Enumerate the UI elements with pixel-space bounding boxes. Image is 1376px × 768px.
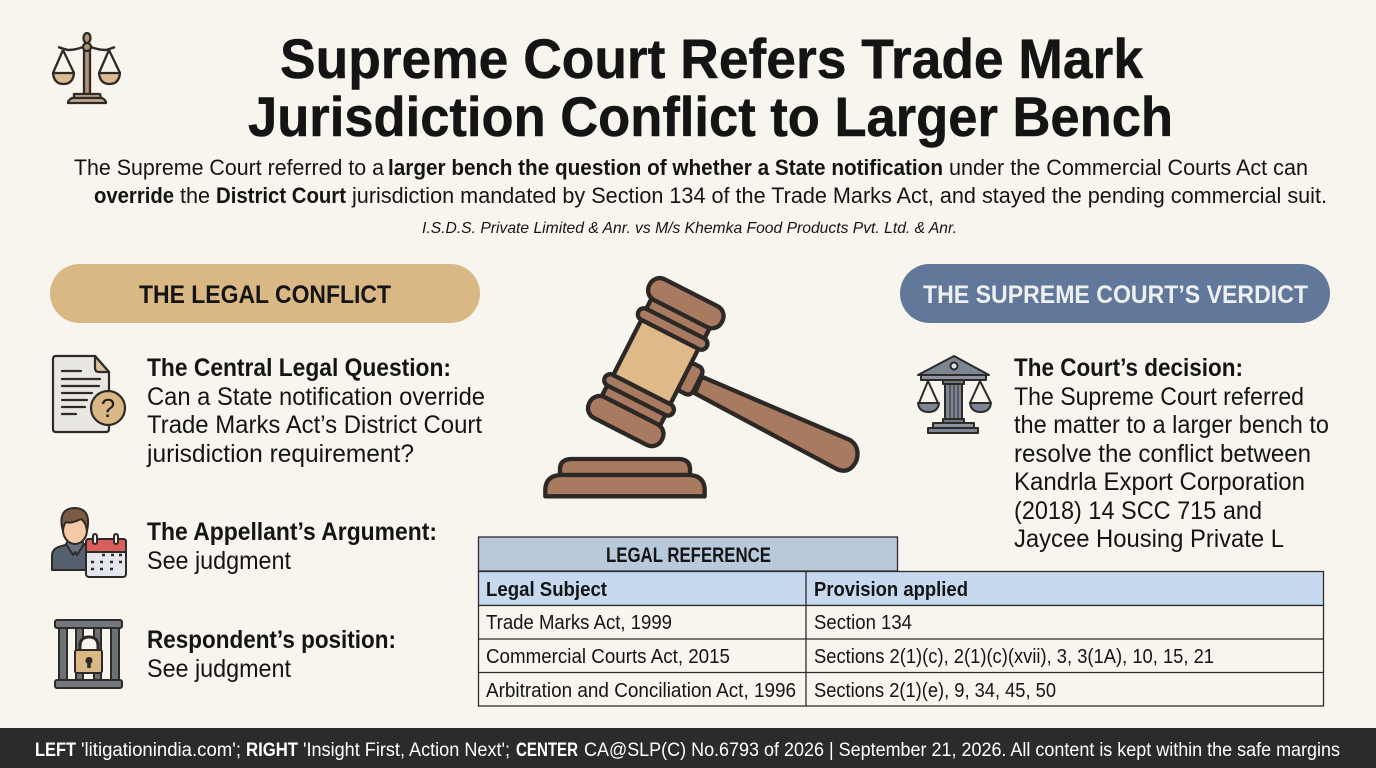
footer bar: 'litigationindia.com'; (81, 740, 241, 761)
subtitle summary: jurisdiction mandated by Section 134 of the Trade Marks Act, and stayed the pending commercial suit. (351, 183, 1327, 208)
title (248, 27, 1173, 148)
table body rows: Sections 2(1)(e), 9, 34, 45, 50 (814, 680, 1056, 702)
panel heading: the legal conflict: THE LEGAL CONFLICT (139, 281, 391, 309)
text block: central legal question (146, 354, 485, 468)
gavel handle (695, 377, 857, 471)
subtitle summary: District Court (216, 183, 347, 208)
text block: court's decision: Kandrla Export Corporation (1014, 468, 1305, 496)
text block: central legal question: Can a State notification override (147, 383, 485, 411)
icon: scales of justice (53, 33, 120, 103)
icon: gavel (545, 274, 857, 496)
gavel sound block (545, 459, 705, 496)
text block: court's decision: The Supreme Court referred (1014, 383, 1304, 411)
text block: appellant's argument: The Appellant’s Argument: (147, 518, 437, 546)
table header row: Legal Subject (486, 579, 607, 601)
subtitle summary: The Supreme Court referred to a (74, 155, 385, 180)
text block: court's decision: (2018) 14 SCC 715 and (1014, 497, 1262, 525)
icon: document with question mark: ? (101, 393, 115, 423)
text block: respondent's position: Respondent’s position: (147, 626, 396, 654)
subtitle summary (74, 155, 1327, 208)
subtitle summary: the (180, 183, 210, 208)
text block: court's decision: resolve the conflict between (1014, 440, 1311, 468)
text block: respondent's position (147, 626, 396, 683)
footer bar (0, 728, 1376, 768)
footer bar: RIGHT (246, 740, 298, 761)
table header row: Provision applied (814, 579, 968, 601)
text block: court's decision: The Court’s decision: (1014, 354, 1243, 382)
icon: courthouse with scales (918, 356, 991, 433)
icon: document with question mark (53, 356, 125, 432)
footer bar: 'Insight First, Action Next'; (303, 740, 510, 761)
footer bar: CENTER (516, 740, 578, 761)
icon: padlock behind bars (55, 620, 122, 688)
table body rows: Trade Marks Act, 1999 (486, 612, 672, 634)
table body rows: Commercial Courts Act, 2015 (486, 646, 730, 668)
text block: central legal question: jurisdiction requirement? (146, 440, 414, 468)
table header row (478, 572, 1324, 606)
panel heading: the supreme court's verdict: THE SUPREME COURT’S VERDICT (923, 281, 1308, 309)
text block: court's decision: Jaycee Housing Private L (1014, 525, 1284, 553)
table body rows: Arbitration and Conciliation Act, 1996 (486, 680, 796, 702)
title: Jurisdiction Conflict to Larger Bench (248, 85, 1173, 148)
subtitle summary: override (94, 183, 174, 208)
subtitle summary: under the Commercial Courts Act can (949, 155, 1308, 180)
subtitle summary: larger bench the question of whether a State notification (388, 155, 943, 180)
footer bar: CA@SLP(C) No.6793 of 2026 | September 21, 2026. All content is kept within the safe margins (584, 740, 1340, 761)
table title: LEGAL REFERENCE (606, 544, 771, 567)
text block: appellant's argument: See judgment (147, 547, 291, 575)
legal reference table (478, 537, 1324, 706)
title: Supreme Court Refers Trade Mark (280, 27, 1144, 90)
panel heading: the legal conflict (50, 264, 480, 323)
table title (478, 537, 898, 571)
text block: appellant's argument (147, 518, 437, 575)
case citation: I.S.D.S. Private Limited & Anr. vs M/s Khemka Food Products Pvt. Ltd. & Anr. (422, 220, 957, 237)
text block: central legal question: Trade Marks Act’s District Court (147, 411, 482, 439)
gavel head (584, 274, 733, 453)
icon: person with calendar (52, 508, 126, 577)
text block: court's decision: the matter to a larger bench to (1014, 411, 1329, 439)
table body rows: Sections 2(1)(c), 2(1)(c)(xvii), 3, 3(1A), 10, 15, 21 (814, 646, 1214, 668)
panel heading: the supreme court's verdict (900, 264, 1330, 323)
footer bar: LEFT (35, 740, 76, 761)
text block: court's decision (1014, 354, 1329, 553)
table body rows: Section 134 (814, 612, 912, 634)
text block: central legal question: The Central Legal Question: (147, 354, 451, 382)
table body rows (478, 571, 1324, 706)
text block: respondent's position: See judgment (147, 655, 291, 683)
